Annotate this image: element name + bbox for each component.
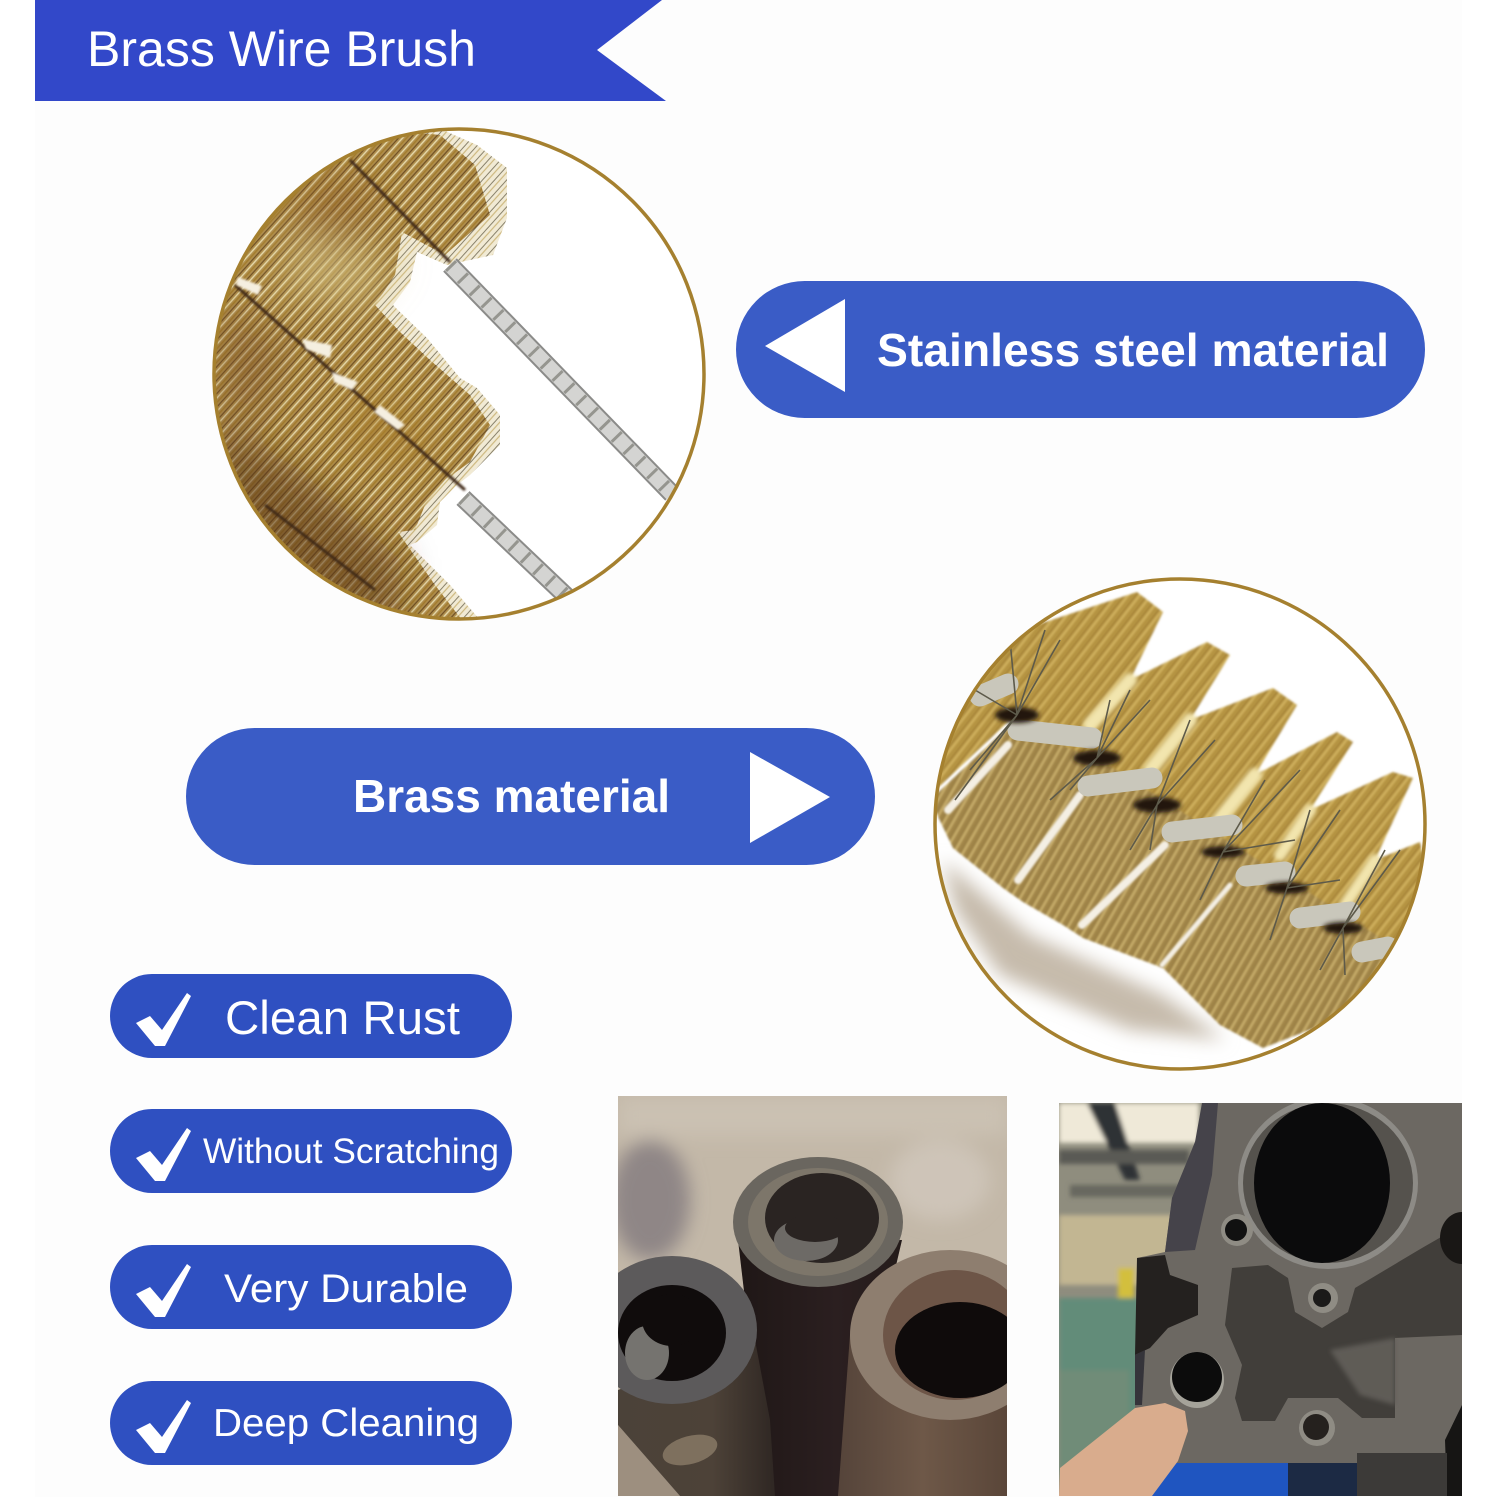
callout: stainless steel material: [736, 281, 1425, 418]
benefit pill: Clean Rust: [110, 974, 512, 1058]
icon: check mark: [136, 1128, 191, 1181]
icon: check mark: [136, 993, 191, 1046]
benefit pill: Without Scratching: Without Scratching: [203, 1132, 499, 1171]
benefit pill: Deep Cleaning: Deep Cleaning: [213, 1402, 479, 1445]
photo: engine block held by hand: [1059, 1097, 1484, 1497]
callout: brass material: Brass material: [353, 770, 670, 822]
icon: check mark: [136, 1400, 191, 1453]
benefit pill: Very Durable: [110, 1245, 512, 1329]
callout: stainless steel material: Stainless steel material: [877, 324, 1389, 376]
benefit pill: Deep Cleaning: [110, 1381, 512, 1465]
title banner: Brass Wire Brush: [87, 21, 476, 77]
title banner: [35, 0, 666, 101]
circle photo: brass brush close-up: [925, 579, 1435, 1069]
photo: threaded metal pipes: [618, 1096, 1007, 1496]
circle photo: stainless steel brush close-up: [200, 120, 704, 640]
icon: check mark: [136, 1264, 191, 1317]
benefit pill: Very Durable: Very Durable: [224, 1267, 468, 1311]
benefit pill: Clean Rust: Clean Rust: [225, 991, 460, 1044]
callout: brass material: [186, 728, 875, 865]
benefit pill: Without Scratching: [110, 1109, 512, 1193]
